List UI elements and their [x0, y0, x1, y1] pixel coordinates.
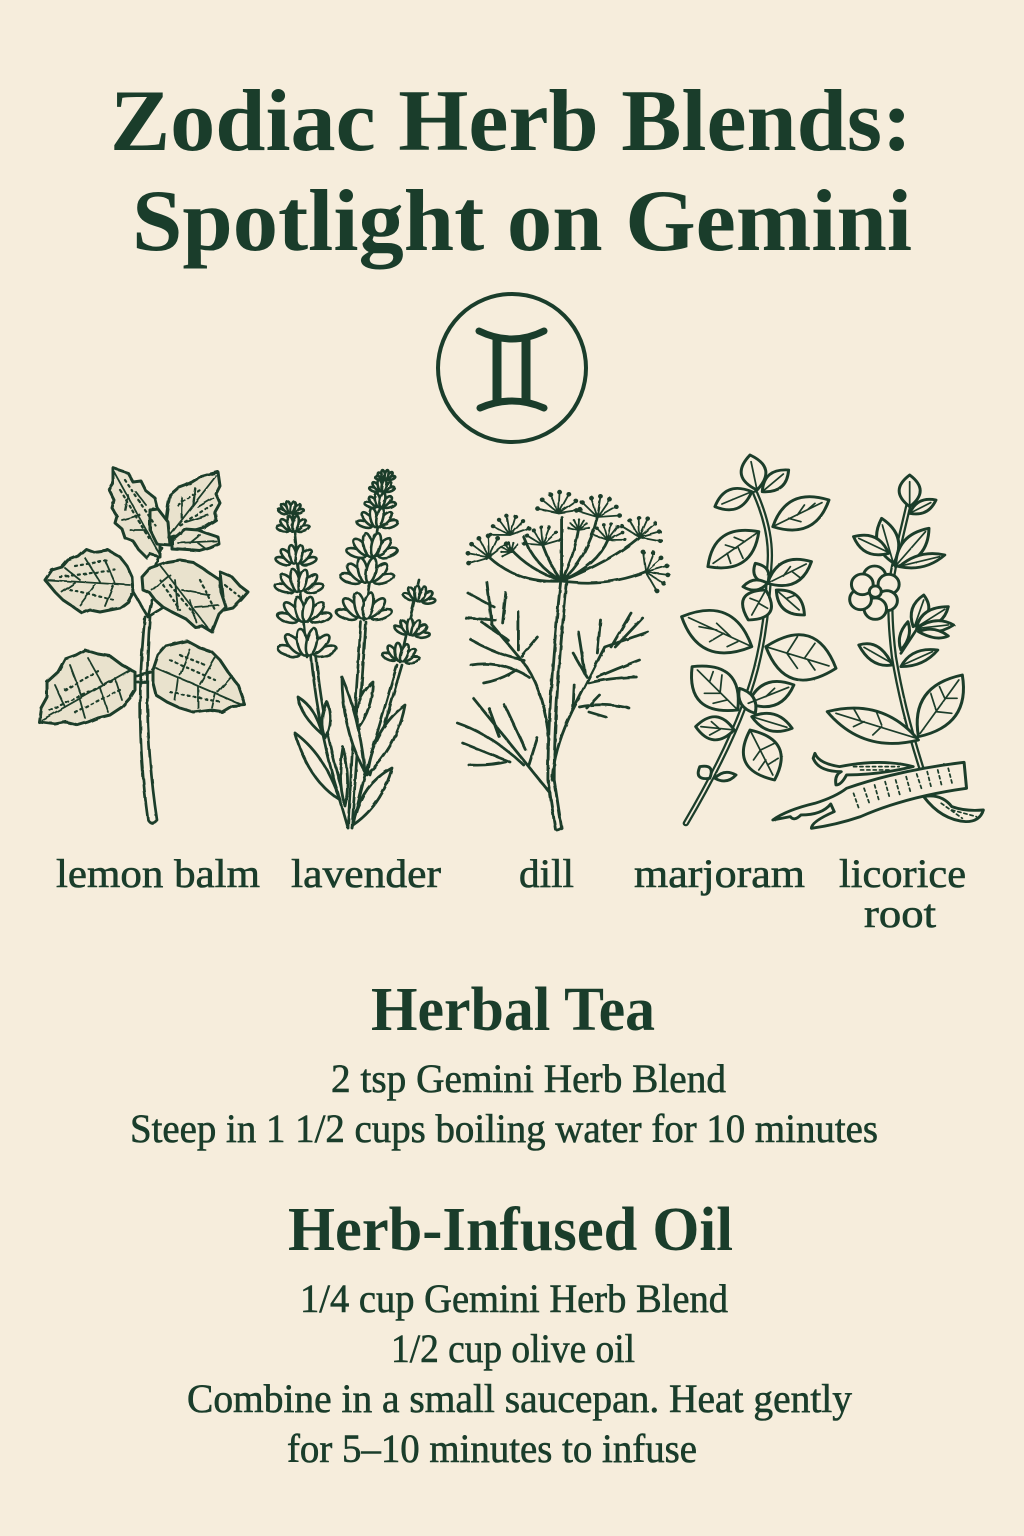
title: Spotlight on Gemini: [132, 173, 912, 270]
icon: Gemini symbol in circle: [438, 294, 586, 442]
text: oil instructions: 1/2 cup olive oil: [391, 1326, 635, 1371]
text: oil instructions: [187, 1276, 852, 1471]
recipe: herbal tea: [130, 976, 878, 1151]
label: licorice root: [839, 851, 966, 936]
illustration: marjoram: [682, 455, 836, 823]
text: oil instructions: for 5–10 minutes to infuse: [287, 1426, 697, 1471]
label: lavender: lavender: [291, 851, 441, 896]
label: licorice root: licorice: [839, 851, 966, 896]
title: [110, 73, 912, 270]
label: licorice root: root: [864, 891, 936, 936]
illustration: licorice root: [773, 475, 983, 828]
heading: Herb-Infused Oil: Herb-Infused Oil: [288, 1196, 733, 1264]
label: dill: dill: [519, 851, 574, 896]
label: lemon balm: lemon balm: [56, 851, 260, 896]
text: tea instructions: 2 tsp Gemini Herb Blend: [331, 1056, 726, 1101]
illustration: lavender: [274, 470, 438, 828]
heading: Herbal Tea: Herbal Tea: [371, 976, 655, 1044]
text: tea instructions: [130, 1056, 878, 1151]
herb labels: [56, 851, 966, 936]
illustration: dill: [457, 490, 677, 830]
title: Zodiac Herb Blends:: [110, 73, 912, 170]
label: marjoram: marjoram: [634, 851, 805, 896]
illustration: lemon balm: [39, 468, 248, 823]
text: oil instructions: 1/4 cup Gemini Herb Blend: [300, 1276, 728, 1321]
recipe: herb-infused oil: [187, 1196, 852, 1471]
text: oil instructions: Combine in a small saucepan. Heat gently: [187, 1376, 852, 1421]
text: tea instructions: Steep in 1 1/2 cups boiling water for 10 minutes: [130, 1106, 878, 1151]
